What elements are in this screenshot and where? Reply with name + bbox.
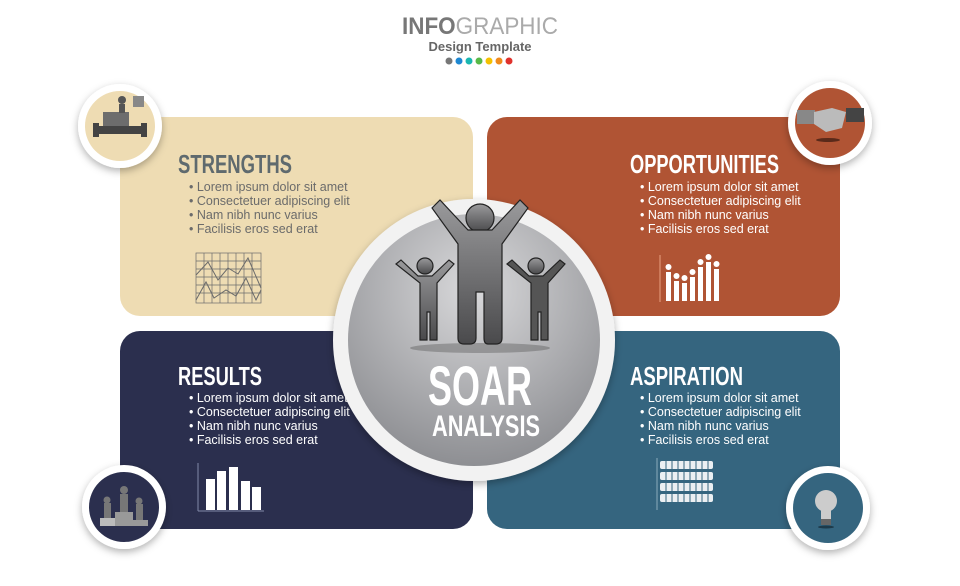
panel: aspiration: • Lorem ipsum dolor sit amet — [640, 391, 799, 405]
people pictogram — [657, 458, 713, 510]
panel: results: • Lorem ipsum dolor sit amet — [189, 391, 348, 405]
panel: results: • Nam nibh nunc varius — [189, 419, 318, 433]
panel: results: RESULTS — [178, 361, 262, 391]
icon: people — [396, 200, 565, 344]
panel: results: • Facilisis eros sed erat — [189, 433, 318, 447]
icon: strengths — [78, 84, 162, 168]
center circle: SOAR analysis: ANALYSIS — [432, 410, 540, 443]
panel: aspiration: • Nam nibh nunc varius — [640, 419, 769, 433]
panel: opportunities: • Lorem ipsum dolor sit amet — [640, 180, 799, 194]
panel: opportunities: • Consectetuer adipiscing elit — [640, 194, 801, 208]
line chart — [196, 253, 261, 303]
panel: opportunities: • Facilisis eros sed erat — [640, 222, 769, 236]
center circle: SOAR analysis: SOAR — [428, 354, 532, 417]
bar chart — [198, 463, 264, 511]
panel: results: • Consectetuer adipiscing elit — [189, 405, 350, 419]
panel: opportunities — [487, 117, 840, 316]
panel: aspiration: ASPIRATION — [630, 361, 743, 391]
panel: aspiration — [487, 331, 840, 529]
header: Design Template — [428, 39, 532, 54]
panel: opportunities: OPPORTUNITIES — [630, 149, 779, 179]
panel: strengths: • Facilisis eros sed erat — [189, 222, 318, 236]
panel: results — [120, 331, 473, 529]
icon: opportunities — [788, 81, 872, 165]
panel: strengths: • Nam nibh nunc varius — [189, 208, 318, 222]
center circle: SOAR analysis — [333, 199, 615, 481]
panel: opportunities: • Nam nibh nunc varius — [640, 208, 769, 222]
icon: results — [82, 465, 166, 549]
bar chart with dots — [660, 254, 720, 302]
header: INFOGRAPHIC — [402, 13, 558, 40]
panel: strengths: STRENGTHS — [178, 149, 292, 179]
panel: strengths: • Lorem ipsum dolor sit amet — [189, 180, 348, 194]
panel: aspiration: • Consectetuer adipiscing elit — [640, 405, 801, 419]
panel: aspiration: • Facilisis eros sed erat — [640, 433, 769, 447]
panel: strengths — [120, 117, 473, 316]
panel: strengths: • Consectetuer adipiscing elit — [189, 194, 350, 208]
icon: aspiration — [786, 466, 870, 550]
header — [402, 13, 558, 64]
